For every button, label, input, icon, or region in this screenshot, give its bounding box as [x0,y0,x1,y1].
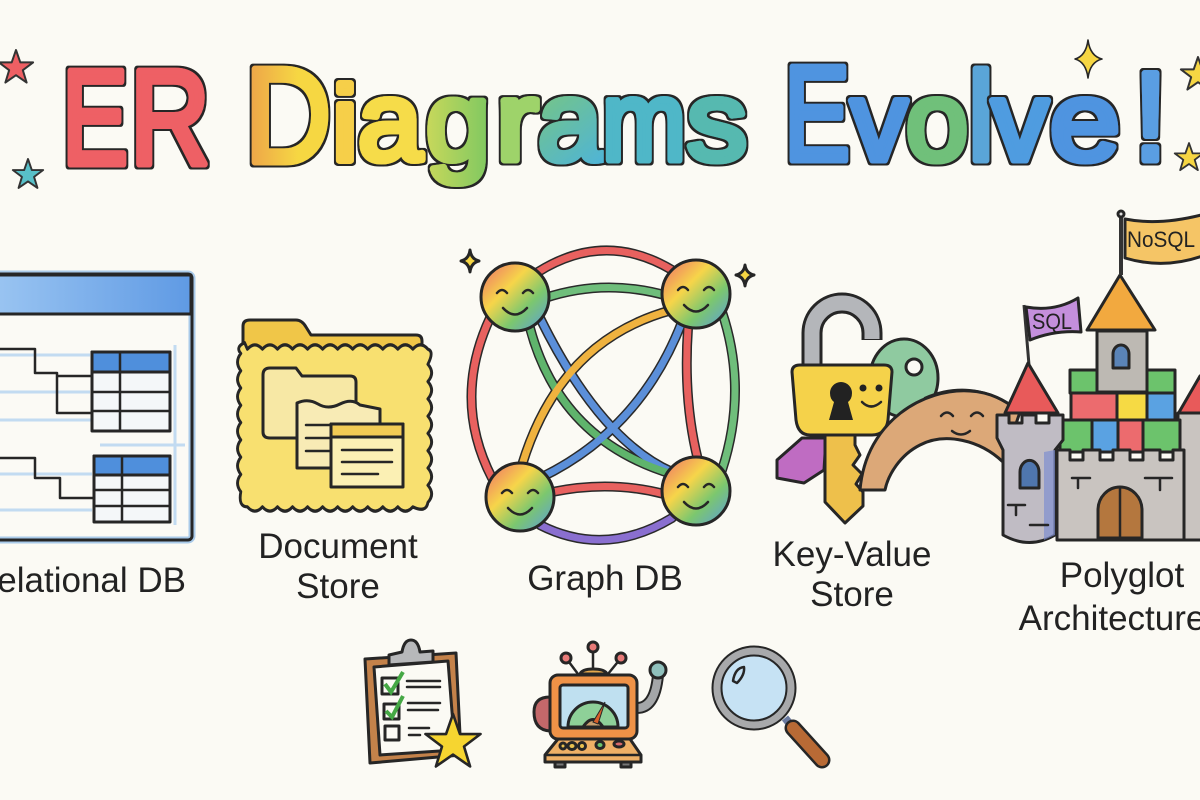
right tower [1178,413,1200,540]
title: l [968,48,994,187]
title: a [538,59,603,184]
label: Graph DB [527,559,683,598]
label: Key-Value [773,535,931,574]
title: r [496,59,538,184]
inner folder 3 [331,424,403,487]
icon: clipboard with star [365,640,481,766]
title: v [992,59,1048,184]
inner folder 1 [263,368,356,438]
title: i [332,65,358,183]
title: v [851,59,907,184]
key bow [870,339,938,417]
title [62,38,1167,193]
panel: document store [238,320,432,606]
left red cone [1005,363,1058,413]
title: E [784,38,850,189]
connectors [0,349,94,498]
panel: graph DB [461,250,754,598]
checklist [382,672,440,740]
colored blocks [1060,370,1180,452]
right red cone [1178,376,1200,414]
arm [637,662,666,708]
title: m [602,59,686,184]
window [0,274,192,540]
title: E [62,42,128,193]
title: e [1050,59,1120,184]
antennas [561,642,626,674]
panel: key-value store [773,303,1020,614]
main wall [1057,450,1184,540]
label line 2: Architecture [1019,599,1200,638]
board [365,653,461,763]
faint rows [0,345,185,525]
SQL flag: SQL [1032,309,1072,334]
door [1098,487,1142,538]
screen and gauge [560,685,628,728]
label line 2: Store [810,575,894,614]
folder [238,320,432,511]
label: Document [258,527,418,566]
title: R [130,42,210,193]
sparkles [461,250,754,286]
bridge [860,390,1020,490]
label: Polyglot [1060,556,1185,595]
title: D [245,40,331,191]
title: g [426,59,490,184]
table 2 [94,456,170,522]
title: a [358,59,423,184]
orange cone [1087,275,1155,330]
side bump [534,697,550,731]
padlock shackle [812,303,872,366]
top tower [1097,331,1147,392]
purple tag [777,438,826,483]
label line 2: Store [296,567,380,606]
edges [471,250,735,540]
panel: relational DB [0,274,192,600]
body [550,675,637,739]
icon: magnifying glass [717,651,822,760]
key shaft [825,432,863,523]
title: o [906,59,968,184]
left tower [997,415,1063,542]
title: s [687,59,747,184]
NoSQL flag [1118,211,1200,275]
nodes [481,260,730,531]
title: ! [1134,48,1167,187]
SQL flag [1024,298,1081,365]
inner folder 2 [297,401,380,468]
table 1 [92,352,170,431]
NoSQL flag: NoSQL [1127,227,1195,252]
star [425,714,481,766]
padlock body [792,365,892,435]
clip [389,640,433,665]
panel: polyglot architecture [997,211,1200,638]
edge outlines [471,250,735,540]
icon: robot gauge machine [534,642,666,767]
decorative stars [0,40,1200,188]
console base [545,739,641,767]
